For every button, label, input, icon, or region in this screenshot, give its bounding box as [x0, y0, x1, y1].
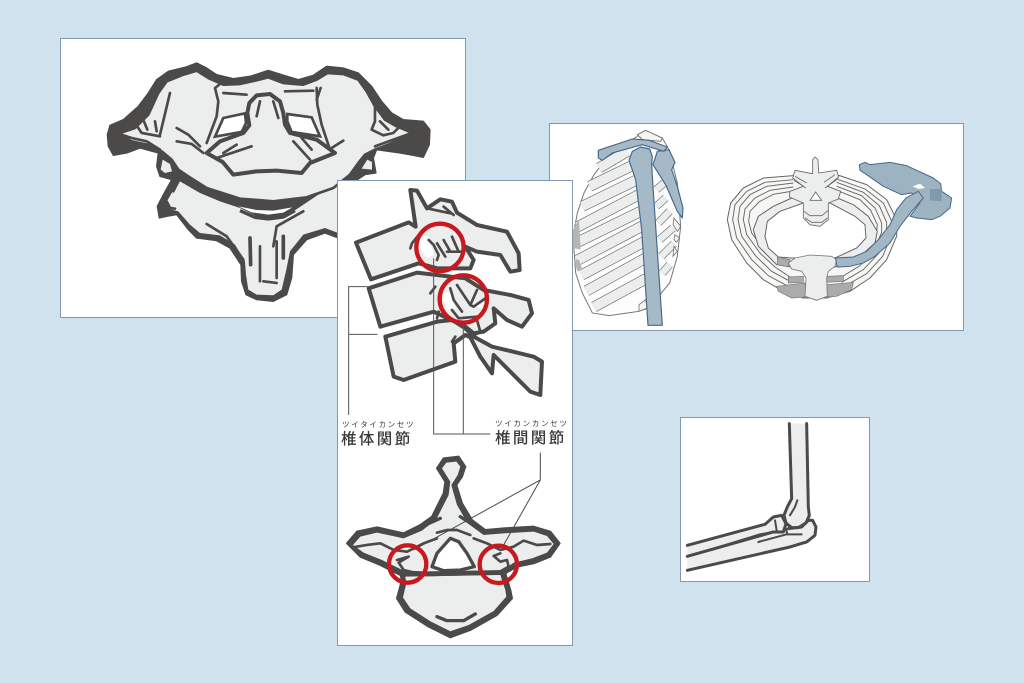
scapula: [859, 162, 952, 220]
leader lines: [414, 453, 540, 550]
label: right furigana: ツイカンカンセツ: [495, 419, 569, 428]
leader lines right: [434, 258, 490, 434]
vertebra 3: [385, 320, 542, 395]
illustration: vertebra from above: [347, 453, 560, 637]
scapula: [653, 150, 683, 218]
label: intervertebral joint: 椎間関節: [495, 429, 567, 447]
red circles: [389, 545, 426, 583]
leader lines left: [349, 287, 378, 415]
illustration: elbow bones: [687, 424, 816, 571]
label: vertebral body joint: 椎体関節: [341, 430, 413, 448]
panel: rib cage with shoulder girdle: [550, 124, 964, 330]
humerus: [629, 147, 662, 325]
panel: elbow joint: [680, 418, 870, 582]
illustration: rib cage side view with humerus and scapula: [573, 130, 683, 325]
clavicle: [598, 139, 667, 160]
clavicle: [835, 191, 923, 267]
vertebra 1: [356, 190, 520, 279]
label: facet joint left furigana: ツイタイカンセツ: [342, 420, 415, 429]
panel: spine joints diagram: [338, 180, 572, 646]
joint gaps: [420, 237, 485, 311]
spine: [789, 157, 841, 226]
rib hole: [765, 203, 866, 258]
panel: cervical vertebra from above: [60, 38, 466, 318]
illustration: cervical vertebra: [107, 63, 430, 301]
red circles: [416, 224, 464, 271]
vertebra 2: [369, 273, 532, 333]
illustration: vertebrae side view: [349, 190, 542, 434]
illustration: rib cage from above with clavicle and scapula: [727, 157, 952, 300]
